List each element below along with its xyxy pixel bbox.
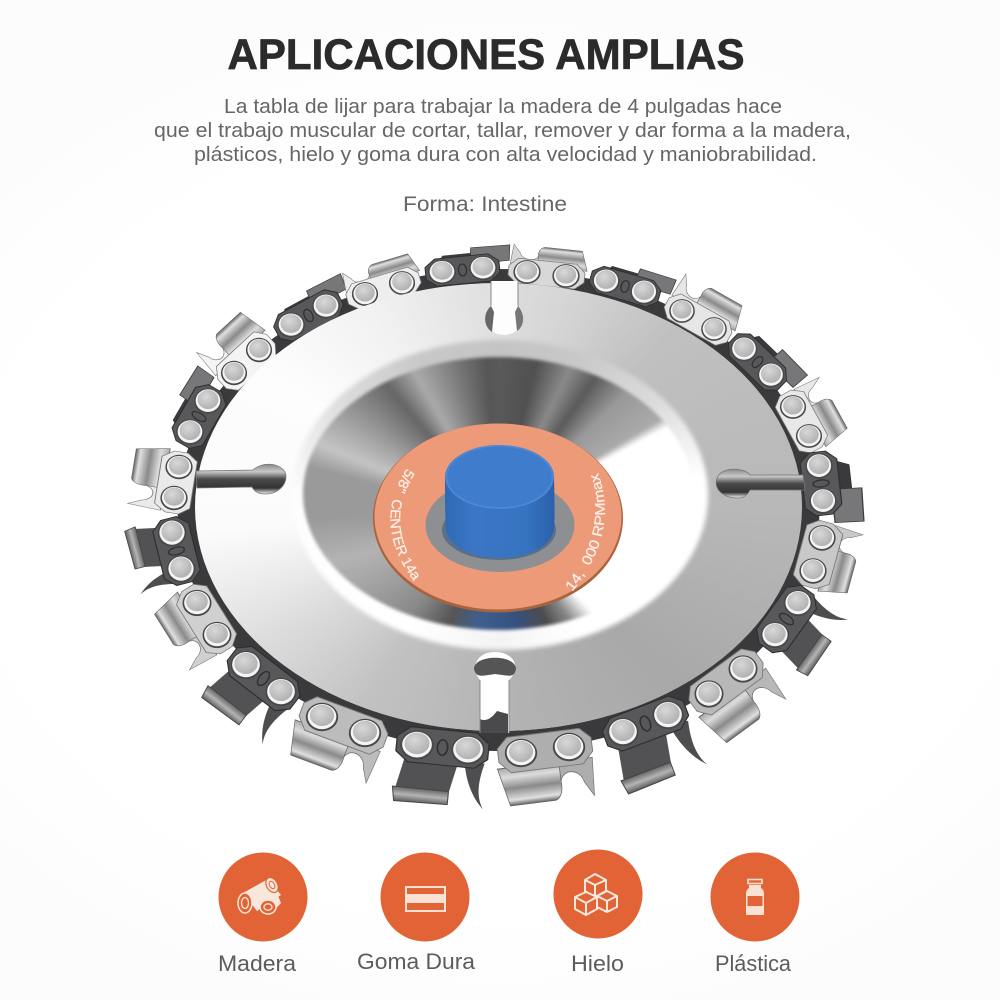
chain link 18 [159,365,236,453]
slot: right [716,469,805,498]
blue cap [442,445,556,560]
material: madera [218,852,308,976]
hub text: speed: 14, 000 RPMmax [566,472,606,592]
label: Plástica [715,951,792,976]
chain link 21 [340,252,425,312]
slot: bottom [474,652,516,733]
icon: ice cubes [554,850,642,938]
slot: top [485,281,523,335]
chain link 14 [200,640,306,744]
hub text: size: 5/8" CENTER 14a [390,469,418,582]
chain link 6 [799,447,866,528]
description: que el trabajo muscular de cortar, tallar, remover y dar forma a la madera, [154,119,851,142]
chain link 19 [195,308,283,396]
icon: bottle [710,852,800,942]
chain link 20 [266,273,358,346]
chain link 12 [391,725,490,809]
material: plastica [710,852,800,976]
label: Hielo [571,951,624,976]
material: hielo [554,850,642,976]
chain link 10 [599,692,707,795]
chain rivets [158,256,837,767]
chain link 3 [660,273,748,350]
chain link 9 [681,643,788,747]
label: Goma Dura [357,949,476,974]
description [154,95,851,166]
bowl rim [292,340,708,650]
material: goma dura [357,852,476,974]
chain link 7 [791,517,864,599]
icon: wood logs [218,852,308,942]
chain link 17 [127,443,199,516]
slot: left [196,464,286,494]
shape note: Forma: Intestine [403,193,567,216]
chain link 5 [772,375,850,459]
description: plásticos, hielo y goma dura con alta velocidad y maniobrabilidad. [194,143,817,166]
saw disc [195,283,802,731]
label: Madera [218,951,297,976]
title: APLICACIONES AMPLIAS [228,31,744,79]
chain link 4 [723,320,808,404]
icon: rubber sheet [380,852,470,942]
chain link 13 [283,692,392,784]
chain link 16 [124,514,202,595]
chain link 2 [587,256,677,313]
chain link 22 [424,244,513,287]
chain link 11 [494,727,598,807]
chain link 15 [151,577,241,672]
description: La tabla de lijar para trabajar la madera de 4 pulgadas hace [224,95,782,118]
orange hub label [373,424,623,612]
chain link 8 [751,579,848,677]
bowl centre [303,357,693,630]
grey washer [426,478,574,572]
chain link 1 [507,244,589,290]
